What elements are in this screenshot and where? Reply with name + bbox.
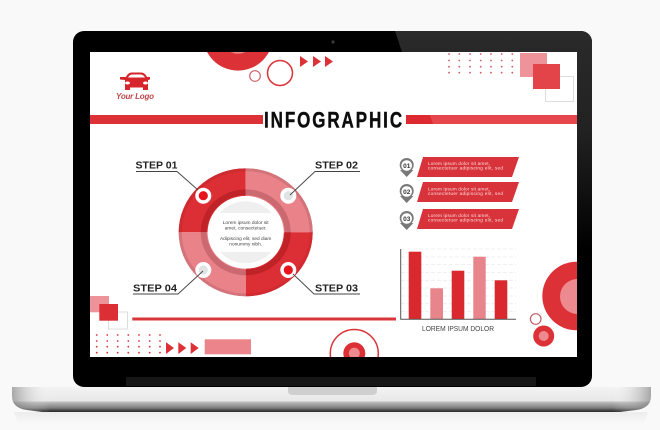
logo text: Your Logo — [116, 92, 154, 101]
banner 03: consectetuer adipiscing elit, sed — [428, 218, 503, 222]
pin 03: 03 — [403, 216, 411, 223]
bottom arrows — [166, 342, 199, 354]
banner 01 — [400, 157, 519, 177]
banner 02 — [400, 182, 519, 203]
bottom circle target — [330, 330, 378, 378]
center circle: Adipiscing elit, sed diam — [220, 236, 271, 242]
step 03 label — [293, 274, 360, 294]
segment: step 03 — [246, 232, 313, 296]
donut ring — [179, 168, 313, 296]
bottom left squares — [90, 296, 128, 329]
segment: step 02 — [246, 168, 313, 232]
banner 02: consectetuer adipiscing elit, sed — [428, 191, 503, 196]
banner 03: Lorem ipsum dolor sit amet, — [428, 213, 490, 218]
center circle: amet, consectetuer. — [225, 226, 267, 232]
segment: step 01 — [179, 168, 246, 232]
donut chart — [179, 168, 313, 296]
title: INFOGRAPHIC — [264, 108, 404, 133]
step 04 label — [133, 271, 203, 294]
title bars — [90, 115, 577, 124]
outer shaded bands — [180, 170, 311, 295]
logo — [116, 72, 154, 101]
pin 01: 01 — [403, 163, 411, 170]
segment: step 04 — [179, 232, 246, 296]
inner shaded bands — [204, 192, 288, 272]
step 02 label — [290, 160, 360, 195]
icon: car — [120, 72, 150, 90]
laptop screen bezel — [73, 31, 592, 387]
bottom line — [132, 318, 396, 320]
laptop base reflection — [14, 412, 648, 424]
bottom pink rectangle — [205, 339, 251, 354]
center circle: Lorem ipsum dolor sit — [223, 220, 269, 226]
banner 01: Lorem ipsum dolor sit amet, — [428, 161, 490, 166]
center circle: nonummy nibh. — [229, 242, 262, 248]
top arrows — [300, 56, 333, 67]
step 04 label: STEP 04 — [133, 284, 177, 294]
bar chart — [401, 249, 516, 333]
bars — [409, 252, 507, 319]
marker dots — [195, 188, 296, 278]
chart label: LOREM IPSUM DOLOR — [422, 324, 495, 333]
top right squares — [520, 53, 574, 102]
top decorative circle — [207, 52, 269, 71]
step 02 label: STEP 02 — [315, 160, 358, 172]
laptop base — [12, 387, 651, 412]
center circle — [205, 196, 287, 269]
screen — [90, 52, 577, 357]
step 01 label: STEP 01 — [136, 160, 178, 172]
small rings — [250, 60, 292, 86]
step 01 label — [136, 160, 198, 190]
step 03 label: STEP 03 — [315, 284, 358, 294]
banner 03 — [400, 209, 519, 230]
banner 01: consectetuer adipiscing elit, sed — [428, 166, 503, 170]
top dot grid — [448, 53, 513, 74]
banner 02: Lorem ipsum dolor sit amet, — [428, 186, 490, 192]
bottom dot grid — [96, 334, 161, 354]
pin 02: 02 — [403, 189, 411, 196]
right decorative circles — [530, 262, 577, 346]
